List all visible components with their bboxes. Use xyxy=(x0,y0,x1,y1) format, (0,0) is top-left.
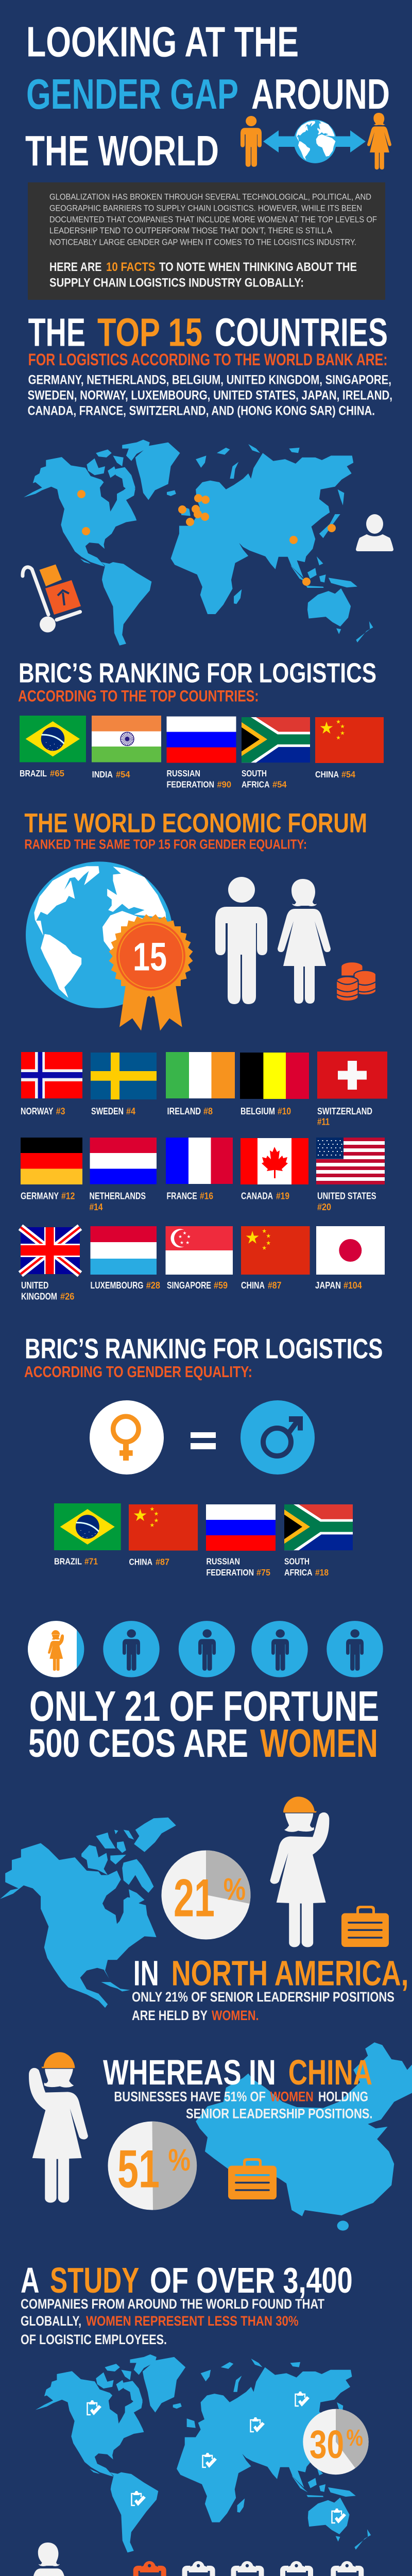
text: china statistic: WOMEN xyxy=(270,2089,314,2105)
heading: study of over 3,400: STUDY xyxy=(50,2260,139,2300)
icon: briefcase on map xyxy=(228,2158,277,2199)
flag labels row 1: #11 xyxy=(317,1116,330,1127)
10 facts statement xyxy=(49,260,357,290)
pie chart: 30 percent: % xyxy=(346,2425,363,2451)
flag labels row 3 xyxy=(21,1280,362,1302)
text: study detail: OF LOGISTIC EMPLOYEES. xyxy=(21,2332,167,2347)
pie chart: 30 percent xyxy=(303,2409,369,2475)
world map with clipboards xyxy=(36,2354,371,2552)
icon: briefcase xyxy=(341,1906,389,1947)
heading: fortune 500 CEOs: 500 CEOS ARE xyxy=(28,1721,248,1766)
flag labels row 2: UNITED STATES xyxy=(317,1191,376,1201)
flag labels row 1: SWITZERLAND xyxy=(317,1106,372,1116)
flag labels row 1: NORWAY xyxy=(21,1106,54,1116)
flag row: BRIC logistics xyxy=(20,716,384,763)
heading: top 15 countries: THE xyxy=(28,311,85,355)
intro paragraph: GLOBALIZATION HAS BROKEN THROUGH SEVERAL TECHNOLOGICAL, POLITICAL, AND xyxy=(49,192,371,201)
title: GENDER GAP xyxy=(26,70,238,118)
pie chart: 21 percent xyxy=(162,1851,250,1939)
text: study detail: GLOBALLY, xyxy=(21,2313,81,2329)
flag labels row 2: #16 xyxy=(200,1191,213,1201)
flag labels row 2: #12 xyxy=(61,1191,75,1201)
flag labels row 3: #26 xyxy=(60,1292,74,1302)
intro paragraph xyxy=(49,192,377,247)
flag labels: BRIC gender equality: #18 xyxy=(315,1567,329,1578)
icon: rank 15 ribbon medal xyxy=(109,914,193,1030)
flag labels row 2: GERMANY xyxy=(21,1191,59,1201)
heading: whereas in china: CHINA xyxy=(288,2053,372,2092)
flag labels: BRIC logistics: #54 xyxy=(272,779,287,790)
icon: hand truck with boxes xyxy=(23,565,81,633)
icon: woman xyxy=(26,2543,72,2576)
flag labels row 3: CHINA xyxy=(241,1280,265,1291)
flag labels: BRIC gender equality: #71 xyxy=(84,1556,98,1566)
flag labels: BRIC gender equality: #87 xyxy=(156,1557,169,1567)
text: north america statistic: ARE HELD BY xyxy=(132,2008,208,2023)
flag labels row 2: #20 xyxy=(317,1202,331,1212)
flag labels row 2 xyxy=(21,1191,376,1212)
subheading: according to top countries: ACCORDING TO THE TOP COUNTRIES: xyxy=(18,687,259,705)
flag labels: BRIC gender equality: AFRICA xyxy=(284,1567,313,1578)
flag labels row 1: SWEDEN xyxy=(91,1106,124,1116)
pie chart: 51 percent: % xyxy=(168,2143,191,2177)
flag labels: BRIC logistics: CHINA xyxy=(315,769,339,779)
flag row: BRIC gender equality xyxy=(54,1503,353,1551)
flag row 2: gender equality xyxy=(21,1138,385,1184)
heading: in north america: IN xyxy=(133,1953,159,1993)
text: china statistic xyxy=(114,2089,373,2121)
intro paragraph: DOCUMENTED THAT COMPANIES THAT INCLUDE MORE WOMEN AT THE TOP LEVELS OF xyxy=(49,215,377,225)
intro paragraph: NOTICEABLY LARGE GENDER GAP WHEN IT COMES TO THE LOGISTICS INDUSTRY. xyxy=(49,238,356,247)
flag labels row 1: BELGIUM xyxy=(241,1106,275,1116)
icon: globe xyxy=(26,861,173,1008)
flag labels: BRIC gender equality: CHINA xyxy=(129,1557,152,1567)
pie chart: 51 percent xyxy=(108,2122,197,2210)
flag labels row 1: #8 xyxy=(203,1106,213,1116)
pie chart: 51 percent: 51 xyxy=(117,2140,160,2199)
flag labels: BRIC logistics: RUSSIAN xyxy=(167,768,200,778)
icon: rank 15 ribbon medal: 15 xyxy=(133,936,167,979)
title: THE WORLD xyxy=(25,127,219,175)
world map with top 15 markers xyxy=(24,439,373,646)
flag labels: BRIC logistics: BRAZIL xyxy=(20,768,47,778)
pie chart: 21 percent: % xyxy=(224,1872,246,1907)
flag labels: BRIC gender equality: SOUTH xyxy=(284,1556,310,1566)
flag labels: BRIC logistics: FEDERATION xyxy=(167,779,214,790)
subheading: ranked same top 15: RANKED THE SAME TOP 15 FOR GENDER EQUALITY: xyxy=(24,837,307,852)
heading: fortune 500 CEOs: WOMEN xyxy=(260,1721,378,1766)
icon: man xyxy=(215,877,267,1004)
10 facts statement: SUPPLY CHAIN LOGISTICS INDUSTRY GLOBALLY: xyxy=(49,276,304,290)
icon: person xyxy=(356,514,393,551)
icon: female symbol xyxy=(90,1400,164,1475)
text: study detail: WOMEN REPRESENT LESS THAN 30% xyxy=(86,2313,299,2329)
flag labels: BRIC gender equality xyxy=(54,1556,329,1578)
flag row 1: gender equality xyxy=(21,1052,387,1099)
heading: fortune 500 CEOs xyxy=(28,1682,379,1766)
flag labels row 3: #104 xyxy=(344,1280,362,1291)
text: china statistic: HOLDING xyxy=(318,2089,368,2105)
flag labels row 2: CANADA xyxy=(241,1191,273,1201)
flag labels row 3: UNITED xyxy=(21,1280,48,1291)
flag labels: BRIC gender equality: FEDERATION xyxy=(206,1567,254,1578)
flag labels row 1: #10 xyxy=(278,1106,291,1116)
flag labels: BRIC logistics: AFRICA xyxy=(242,779,270,790)
icon: equals sign xyxy=(191,1432,216,1449)
text: north america statistic: WOMEN. xyxy=(212,2008,259,2023)
flag labels row 2: #19 xyxy=(276,1191,289,1201)
flag labels row 3: JAPAN xyxy=(315,1280,341,1291)
flag labels row 3: KINGDOM xyxy=(21,1292,57,1302)
flag labels: BRIC logistics: #90 xyxy=(217,779,231,790)
heading: top 15 countries xyxy=(28,311,388,355)
icon: coins xyxy=(336,962,376,1001)
flag labels row 2: #14 xyxy=(90,1202,103,1212)
text: country list xyxy=(28,374,392,418)
title: LOOKING AT THE xyxy=(26,18,299,66)
flag labels: BRIC gender equality: #75 xyxy=(256,1567,270,1578)
flag labels row 1: #4 xyxy=(126,1106,135,1116)
flag labels row 3: #59 xyxy=(214,1280,228,1291)
pie chart: 30 percent: 30 xyxy=(310,2422,344,2467)
icon row: one woman among men in circles xyxy=(28,1621,383,1677)
flag labels: BRIC logistics: SOUTH xyxy=(242,768,267,778)
flag labels row 2: NETHERLANDS xyxy=(90,1191,146,1201)
intro paragraph: GEOGRAPHIC BARRIERS TO SUPPLY CHAIN LOGISTICS. HOWEVER, WHILE ITS BEEN xyxy=(49,204,362,213)
flag labels row 1: IRELAND xyxy=(167,1106,201,1116)
panel: introduction xyxy=(28,182,385,300)
flag row 3: gender equality xyxy=(21,1226,385,1275)
heading: study of over 3,400: A xyxy=(21,2260,39,2300)
text: north america statistic xyxy=(132,1989,394,2023)
map: north america xyxy=(0,1818,176,2008)
text: china statistic: SENIOR LEADERSHIP POSITIONS. xyxy=(186,2106,373,2121)
flag labels row 3: #87 xyxy=(268,1280,281,1291)
clipboard grid: one thumbs down, nine checks xyxy=(136,2561,372,2576)
title xyxy=(25,18,390,175)
heading: whereas in china: WHEREAS IN xyxy=(103,2053,276,2092)
text: china statistic: BUSINESSES HAVE 51% OF xyxy=(114,2089,266,2105)
icon: woman with hard hat xyxy=(270,1797,329,1947)
text: study detail: COMPANIES FROM AROUND THE WORLD FOUND THAT xyxy=(21,2296,324,2312)
icon: man and woman either side of globe with arrows xyxy=(241,113,391,170)
text: study detail xyxy=(21,2296,324,2347)
flag labels row 1 xyxy=(21,1106,372,1127)
pie chart: 21 percent: 21 xyxy=(174,1868,215,1928)
10 facts statement: 10 FACTS xyxy=(106,260,156,274)
heading: study of over 3,400: OF OVER 3,400 xyxy=(150,2260,353,2300)
heading: top 15 countries: TOP 15 xyxy=(97,311,202,355)
flag labels row 1: #3 xyxy=(56,1106,65,1116)
flag labels: BRIC gender equality: RUSSIAN xyxy=(206,1556,240,1566)
icon: thumbs down clipboard xyxy=(136,2561,169,2576)
flag labels: BRIC logistics: #65 xyxy=(50,768,64,778)
10 facts statement: HERE ARE xyxy=(49,260,102,274)
10 facts statement: TO NOTE WHEN THINKING ABOUT THE xyxy=(159,260,357,274)
intro paragraph: LEADERSHIP TEND TO OUTPERFORM THOSE THAT DON’T, THERE IS STILL A xyxy=(49,226,332,235)
flag labels: BRIC gender equality: BRAZIL xyxy=(54,1556,82,1566)
icon: woman xyxy=(278,879,331,1004)
flag labels: BRIC logistics: #54 xyxy=(116,769,130,779)
flag labels: BRIC logistics: #54 xyxy=(341,769,355,779)
flag labels row 3: SINGAPORE xyxy=(167,1280,211,1291)
flag labels row 2: FRANCE xyxy=(167,1191,197,1201)
flag labels row 3: LUXEMBOURG xyxy=(91,1280,143,1291)
icon: woman with hard hat, mirrored xyxy=(29,2052,88,2202)
flag labels: BRIC logistics: INDIA xyxy=(92,769,113,779)
flag labels row 3: #28 xyxy=(146,1280,160,1291)
icon: male symbol xyxy=(241,1400,315,1475)
flag labels: BRIC logistics xyxy=(20,768,355,790)
map: china xyxy=(196,2042,412,2231)
subheading: according to gender equality: ACCORDING TO GENDER EQUALITY: xyxy=(24,1363,252,1381)
heading: study of over 3,400 xyxy=(21,2260,353,2300)
